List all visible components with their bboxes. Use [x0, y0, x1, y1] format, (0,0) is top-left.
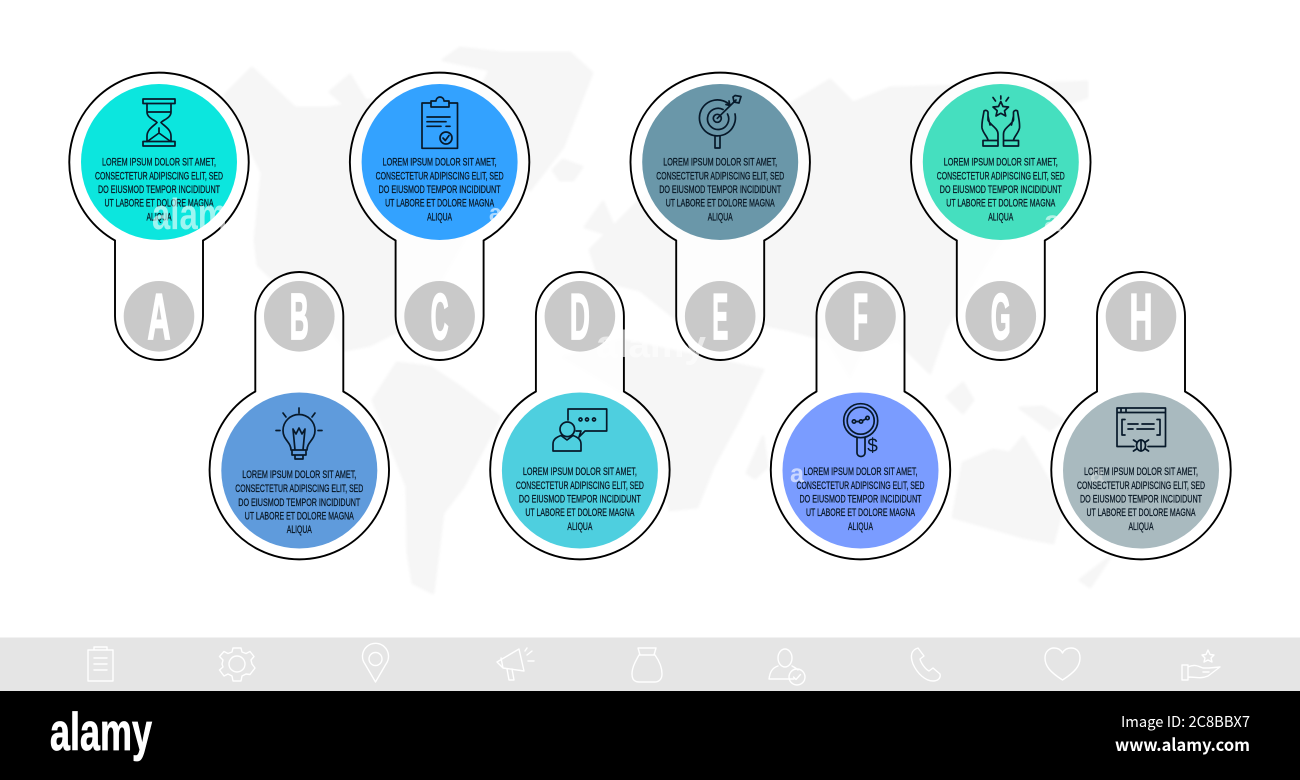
text: description C: ALIQUA	[427, 212, 453, 224]
text: description H	[1077, 466, 1205, 533]
watermarks: a	[790, 458, 805, 488]
icon: hourglass	[143, 99, 175, 146]
badge A	[124, 280, 194, 353]
text: description E: CONSECTETUR ADIPISCING ELIT, SED	[656, 170, 784, 182]
footer bar	[0, 691, 1300, 780]
text: description E	[656, 156, 784, 224]
image id: Image ID: 2C8BBX7	[1121, 711, 1250, 732]
icon: target with arrow	[699, 96, 741, 148]
badge A: A	[148, 280, 170, 353]
icon: money bag	[632, 648, 662, 682]
icon: light bulb	[276, 408, 322, 459]
text: description D: DO EIUSMOD TEMPOR INCIDIDUNT	[519, 494, 641, 506]
text: description F: ALIQUA	[848, 521, 873, 533]
icon: browser window with bug	[1117, 408, 1166, 451]
badge G: G	[991, 280, 1011, 353]
text: description G: UT LABORE ET DOLORE MAGNA	[946, 198, 1056, 210]
text: description E: LOREM IPSUM DOLOR SIT AMET,	[663, 156, 777, 168]
background world map	[225, 48, 1110, 593]
icon: hands holding star	[982, 96, 1020, 146]
text: description C	[376, 156, 504, 224]
icon: dollar sign: $	[867, 436, 878, 457]
icon: heart	[1045, 648, 1080, 680]
icon: clipboard	[422, 97, 458, 148]
card E	[630, 73, 810, 360]
badge E	[685, 280, 756, 353]
card D	[490, 272, 670, 559]
text: description B: ALIQUA	[287, 524, 312, 536]
text: description H: ALIQUA	[1128, 521, 1154, 533]
text: description G: LOREM IPSUM DOLOR SIT AMET,	[944, 156, 1058, 168]
text: description G: CONSECTETUR ADIPISCING ELIT, SED	[937, 170, 1065, 182]
icon: user with check	[769, 649, 805, 685]
icon: speaker with speech bubble	[553, 409, 607, 451]
text: description A: DO EIUSMOD TEMPOR INCIDIDUNT	[98, 184, 220, 196]
watermarks: alam	[152, 190, 227, 239]
text: description F: CONSECTETUR ADIPISCING ELIT, SED	[796, 480, 925, 492]
card G	[911, 73, 1090, 360]
text: description A: CONSECTETUR ADIPISCING ELIT, SED	[95, 170, 223, 182]
text: description H: DO EIUSMOD TEMPOR INCIDIDUNT	[1080, 494, 1202, 506]
badge C	[404, 280, 475, 353]
text: description B: DO EIUSMOD TEMPOR INCIDIDUNT	[238, 497, 360, 509]
watermarks: a	[1090, 458, 1105, 488]
watermarks: a	[1044, 205, 1061, 238]
card A	[69, 73, 249, 360]
text: description G	[937, 156, 1065, 224]
text: description B	[235, 469, 363, 536]
badge H: H	[1130, 280, 1152, 353]
text: description C: UT LABORE ET DOLORE MAGNA	[385, 198, 495, 210]
text: description C: LOREM IPSUM DOLOR SIT AMET,	[383, 156, 497, 168]
text: description H: CONSECTETUR ADIPISCING ELIT, SED	[1077, 480, 1205, 492]
badge G	[966, 280, 1036, 353]
text: description D: CONSECTETUR ADIPISCING ELIT, SED	[516, 480, 644, 492]
card F	[771, 272, 950, 559]
badge B: B	[290, 280, 309, 353]
badge D: D	[570, 280, 590, 353]
text: description G: DO EIUSMOD TEMPOR INCIDIDUNT	[940, 184, 1062, 196]
website: www.alamy.com	[1115, 731, 1250, 756]
text: description F: DO EIUSMOD TEMPOR INCIDIDUNT	[800, 494, 922, 506]
card H	[1051, 272, 1231, 559]
card C	[350, 73, 529, 360]
badge E: E	[712, 280, 728, 353]
icon: megaphone	[497, 648, 534, 680]
badge C: C	[431, 280, 449, 353]
icon: gear	[220, 648, 255, 681]
text: description D: ALIQUA	[567, 521, 593, 533]
text: description F: LOREM IPSUM DOLOR SIT AMET,	[804, 466, 918, 478]
icon: hand with star	[1182, 650, 1220, 680]
text: description E: ALIQUA	[708, 212, 733, 224]
badge B	[264, 280, 335, 353]
text: description H: LOREM IPSUM DOLOR SIT AMET,	[1084, 466, 1198, 478]
text: description C: CONSECTETUR ADIPISCING ELIT, SED	[376, 170, 504, 182]
text: description G: ALIQUA	[988, 212, 1014, 224]
text: description F: UT LABORE ET DOLORE MAGNA	[806, 507, 915, 519]
text: description B: LOREM IPSUM DOLOR SIT AMET,	[242, 469, 356, 481]
watermarks	[152, 190, 1105, 488]
badge F	[825, 280, 896, 353]
text: description E: DO EIUSMOD TEMPOR INCIDIDUNT	[659, 184, 781, 196]
badge H	[1106, 280, 1176, 353]
icon: map pin	[363, 643, 388, 682]
text: description D: UT LABORE ET DOLORE MAGNA	[525, 507, 635, 519]
text: description D: LOREM IPSUM DOLOR SIT AMET,	[523, 466, 637, 478]
badge D	[545, 280, 615, 353]
text: description D	[516, 466, 644, 533]
text: description A: ALIQUA	[146, 212, 172, 224]
icon: clipboard outline	[88, 647, 113, 681]
icon: phone	[911, 648, 940, 681]
badge F: F	[853, 280, 868, 353]
text: description B: UT LABORE ET DOLORE MAGNA	[245, 510, 354, 522]
text: description A: UT LABORE ET DOLORE MAGNA	[104, 198, 214, 210]
text: description F	[796, 466, 925, 533]
footer logo: alamy	[50, 703, 152, 762]
icon: magnifier with dollar	[844, 404, 878, 456]
text: description C: DO EIUSMOD TEMPOR INCIDIDUNT	[379, 184, 501, 196]
text: description A: LOREM IPSUM DOLOR SIT AMET,	[102, 156, 216, 168]
text: description B: CONSECTETUR ADIPISCING ELIT, SED	[235, 483, 363, 495]
text: description E: UT LABORE ET DOLORE MAGNA	[666, 198, 775, 210]
watermarks: alamy	[596, 324, 706, 366]
text: description H: UT LABORE ET DOLORE MAGNA	[1086, 507, 1196, 519]
text: description A	[95, 156, 223, 224]
bottom icon band	[0, 638, 1300, 691]
card B	[210, 272, 389, 559]
watermarks: a	[489, 200, 503, 227]
